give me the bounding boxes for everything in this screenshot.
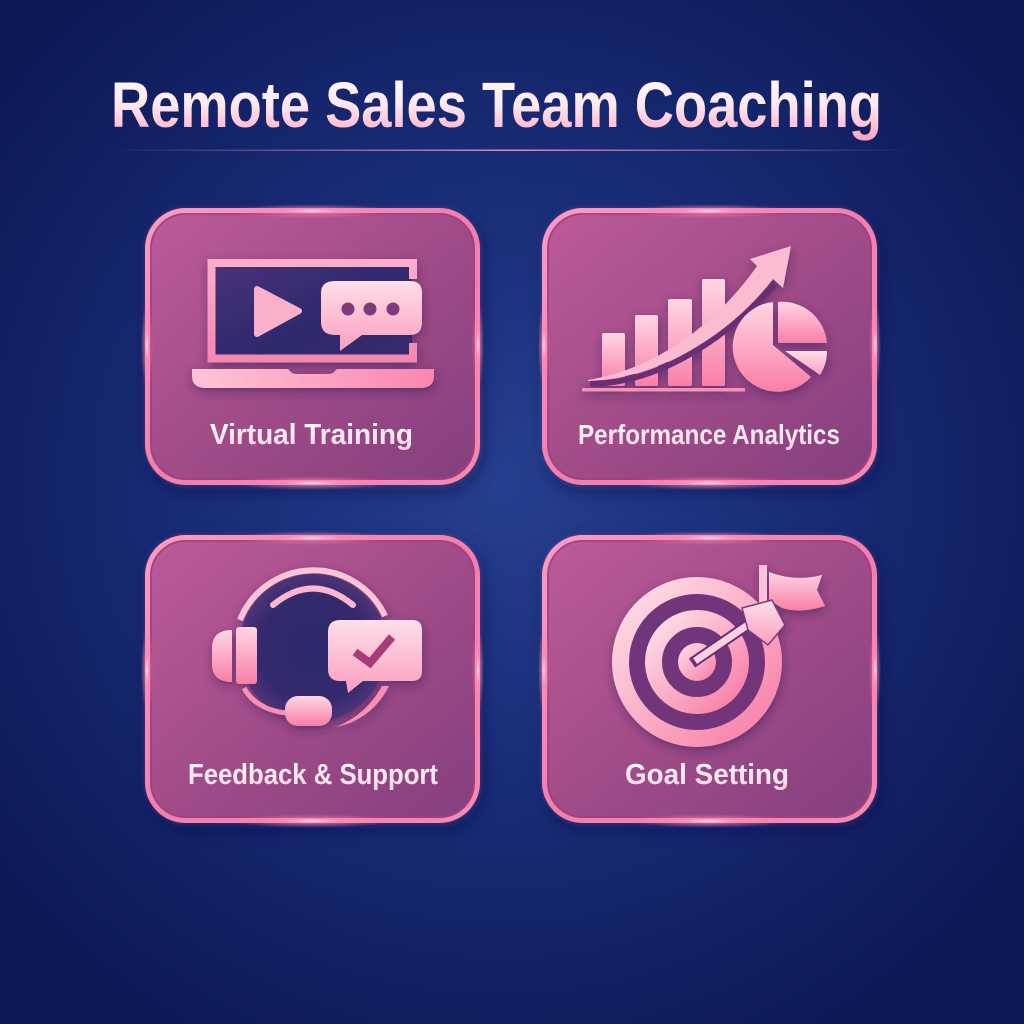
label: Goal Setting xyxy=(625,759,789,791)
icon: headset with check bubble xyxy=(212,570,422,727)
icon: laptop with play button and chat bubble xyxy=(192,263,434,388)
panel: Goal Setting xyxy=(538,531,881,828)
panel: Virtual Training xyxy=(141,204,484,490)
panel: Performance Analytics xyxy=(538,204,881,490)
icon: target with arrow and flag xyxy=(620,565,825,738)
label: Virtual Training xyxy=(210,419,413,451)
panel: Feedback & Support xyxy=(141,531,484,828)
label: Feedback & Support xyxy=(188,759,438,791)
label: Performance Analytics xyxy=(578,419,840,450)
title: Remote Sales Team Coaching xyxy=(111,69,882,141)
icon: bar chart, arrow and pie xyxy=(582,246,827,392)
